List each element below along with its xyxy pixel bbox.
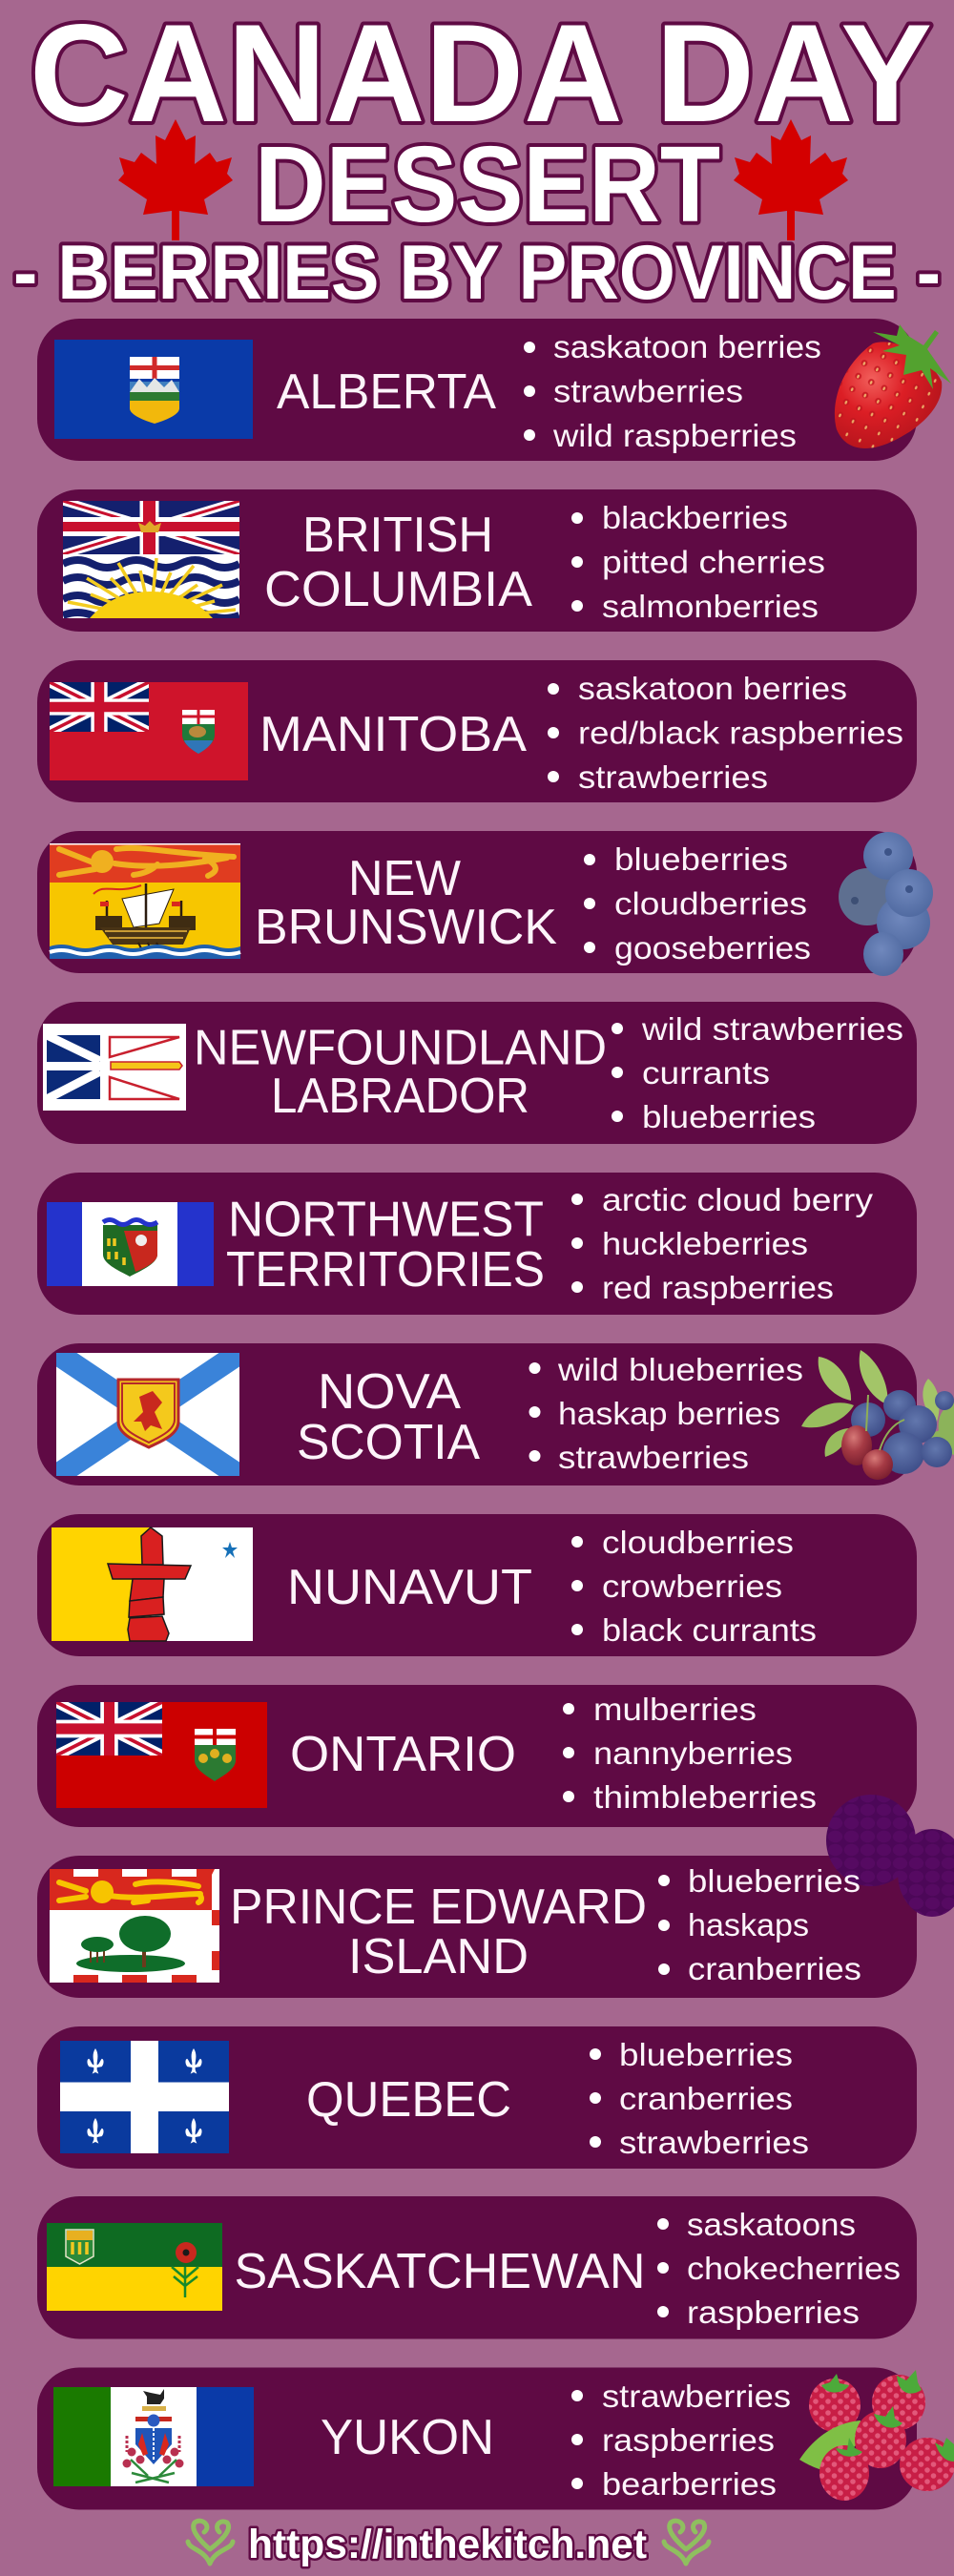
berry list (571, 500, 825, 624)
berry list: cloudberries (602, 1525, 794, 1560)
berry list: raspberries (602, 2422, 775, 2458)
province name: QUEBEC (306, 2072, 511, 2128)
berry list: raspberries (687, 2295, 860, 2330)
flag: Alberta (54, 340, 253, 439)
panel: Alberta (37, 319, 951, 461)
berry list: blueberries (642, 1099, 816, 1134)
flag: Saskatchewan (47, 2223, 222, 2311)
berry list: red/black raspberries (578, 716, 903, 750)
province name (230, 1880, 647, 1984)
panel: Newfoundland and Labrador (37, 1002, 917, 1144)
berry list: red raspberries (602, 1270, 834, 1305)
icon: blackberries (826, 1795, 954, 1917)
berry list (571, 1525, 817, 1648)
province name: NEW (348, 851, 461, 906)
province name: BRUNSWICK (255, 900, 557, 955)
province name: NEWFOUNDLAND (194, 1021, 607, 1076)
flag: Manitoba (50, 682, 248, 780)
berry list: cranberries (619, 2081, 793, 2116)
icon: blueberries (839, 832, 933, 976)
berry list: blueberries (619, 2037, 793, 2072)
province name: MANITOBA (259, 707, 527, 762)
berry list: wild strawberries (641, 1011, 903, 1047)
berry list: strawberries (619, 2125, 809, 2160)
province name (255, 851, 557, 955)
berry list: saskatoon berries (578, 671, 847, 706)
berry list: cranberries (688, 1951, 861, 1986)
berry list: bearberries (602, 2466, 777, 2502)
title line: Dessert: DESSERT (255, 124, 720, 244)
province name: ALBERTA (277, 364, 496, 420)
panel: Quebec (37, 2026, 917, 2169)
flag: Ontario (56, 1702, 267, 1808)
berry list (529, 1352, 803, 1475)
berry list (612, 1011, 903, 1134)
berry list: salmonberries (602, 589, 819, 624)
berry list: cloudberries (614, 885, 807, 922)
berry list: blueberries (614, 841, 788, 877)
berry list: huckleberries (602, 1226, 808, 1261)
berry list (658, 1863, 861, 1986)
icon: right swirl (664, 2521, 709, 2564)
panel: Saskatchewan (37, 2196, 917, 2339)
berry list (571, 1182, 874, 1305)
berry list: crowberries (602, 1568, 782, 1604)
berry list (590, 2037, 809, 2160)
website url: https://inthekitch.net (248, 2522, 647, 2567)
panel: New Brunswick (37, 831, 933, 976)
province name: PRINCE EDWARD (230, 1880, 647, 1935)
flag: Northwest Territories (47, 1202, 214, 1286)
berry list: wild raspberries (552, 418, 797, 453)
icon: left maple leaf (118, 119, 233, 240)
footer (188, 2521, 709, 2567)
panel: Prince Edward Island (37, 1795, 954, 1998)
berry list: gooseberries (614, 930, 811, 966)
province name: BRITISH (302, 508, 493, 563)
berry list: haskap berries (558, 1396, 780, 1431)
flag: Nunavut (52, 1527, 253, 1641)
panel: Northwest Territories (37, 1173, 917, 1315)
province name: TERRITORIES (226, 1242, 545, 1298)
province name (297, 1364, 480, 1470)
berry list: blackberries (602, 500, 788, 535)
province name: COLUMBIA (264, 562, 532, 617)
flag: British Columbia (63, 501, 239, 618)
flag: Newfoundland and Labrador (43, 1024, 186, 1111)
panel: Yukon (37, 2368, 954, 2509)
province name (264, 508, 532, 617)
title (13, 0, 941, 316)
province name: NOVA (318, 1364, 461, 1420)
berry list: wild blueberries (557, 1352, 803, 1387)
province name (226, 1193, 545, 1298)
berry list: arctic cloud berry (602, 1182, 874, 1217)
berry list: strawberries (553, 374, 743, 408)
berry list: strawberries (578, 759, 768, 795)
berry list (524, 329, 821, 453)
berry list: thimbleberries (593, 1779, 817, 1815)
flag: Quebec (60, 2041, 229, 2153)
berry list: strawberries (558, 1440, 749, 1475)
berry list: haskaps (688, 1907, 809, 1942)
province name: SCOTIA (297, 1415, 480, 1470)
icon: raspberries with leaf (799, 2370, 954, 2501)
panel: Nova Scotia (37, 1343, 954, 1485)
icon: left swirl (188, 2521, 233, 2564)
flag: New Brunswick (50, 843, 240, 959)
flag: Yukon (53, 2387, 254, 2486)
province name: SASKATCHEWAN (235, 2244, 645, 2299)
berry list (563, 1692, 817, 1815)
berry list: saskatoon berries (553, 329, 821, 364)
flag: Nova Scotia (56, 1353, 239, 1476)
province name: ISLAND (348, 1929, 529, 1984)
icon: strawberry (835, 324, 951, 448)
province name: LABRADOR (271, 1069, 529, 1124)
berry list (548, 671, 903, 795)
berry list: mulberries (593, 1692, 757, 1727)
panel: British Columbia (37, 489, 917, 632)
berry list: chokecherries (687, 2251, 901, 2286)
province name (194, 1021, 607, 1124)
province name: NUNAVUT (287, 1560, 532, 1615)
berry list (584, 841, 811, 966)
icon: right maple leaf (734, 119, 848, 240)
berry list: saskatoons (687, 2207, 856, 2242)
province name: YUKON (321, 2410, 494, 2465)
berry list: strawberries (602, 2379, 791, 2414)
panel: Manitoba (37, 660, 917, 802)
berry list: pitted cherries (602, 544, 825, 580)
panel: Nunavut (37, 1514, 917, 1656)
berry list: black currants (602, 1612, 817, 1648)
berry list (571, 2379, 791, 2502)
berry list (657, 2207, 901, 2330)
province name: ONTARIO (290, 1727, 516, 1782)
province name: NORTHWEST (228, 1193, 544, 1248)
icon: blueberries and cherries with leaves (801, 1350, 954, 1480)
panel: Ontario (37, 1685, 917, 1827)
berry list: currants (642, 1055, 770, 1091)
berry list: blueberries (688, 1863, 861, 1899)
flag: Prince Edward Island (50, 1869, 219, 1983)
berry list: nannyberries (593, 1735, 793, 1771)
